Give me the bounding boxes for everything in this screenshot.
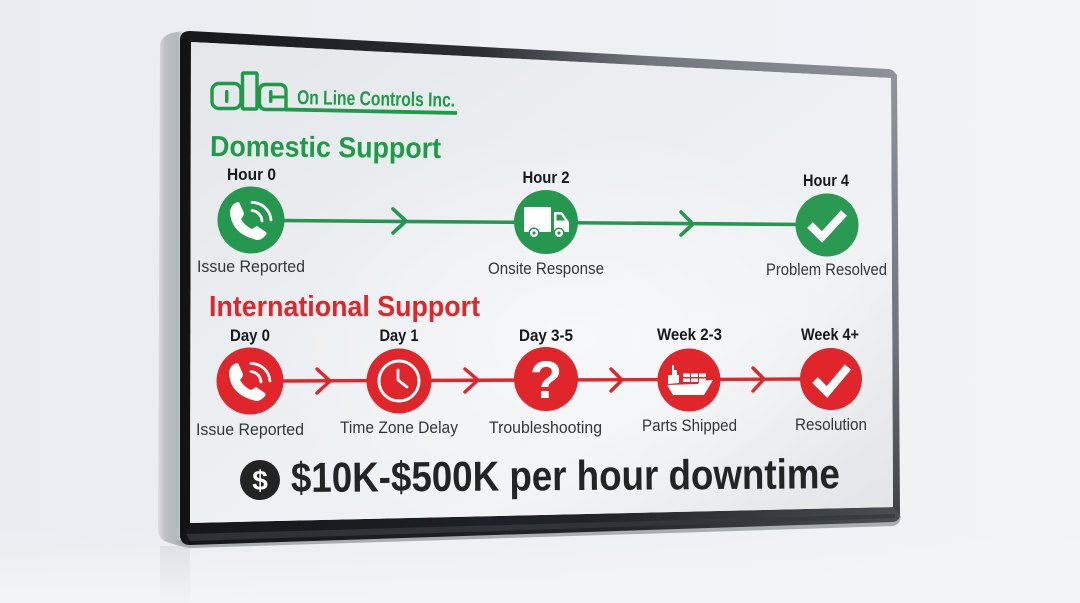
step: Hour 0 Issue Reported [197,166,305,276]
bezel bottom [180,507,900,545]
step: Week 2-3 Parts Shipped: Parts Shipped [642,417,737,435]
bezel left [180,38,191,538]
step: Hour 2 Onsite Response [488,169,604,278]
step: Day 3-5 Troubleshooting: Troubleshooting [489,419,602,437]
step: Hour 4 Problem Resolved: Hour 4 [803,172,850,190]
step: Week 4+ Resolution: Resolution [795,416,867,434]
step: Hour 4 Problem Resolved [766,172,887,279]
bezel right [891,74,900,522]
step: Hour 0 Issue Reported: Issue Reported [197,258,305,276]
step: Day 0 Issue Reported [196,327,304,439]
monitor frame [158,31,901,548]
bottom silver edge [176,516,901,548]
international timeline [196,326,867,439]
heading: International Support: International Support [209,291,480,323]
icon: dollar coin [240,460,280,500]
step: Day 0 Issue Reported: Day 0 [230,327,270,345]
heading: Domestic Support: Domestic Support [210,131,442,165]
screen [190,42,893,523]
connector line with arrows [280,209,800,235]
logo: On Line Controls Inc.: On Line Controls Inc. [297,87,455,112]
domestic timeline [197,166,887,279]
downtime cost callout [240,450,840,501]
connector line with arrows [280,368,805,393]
step: Week 2-3 Parts Shipped [642,326,737,435]
icon: dollar coin: $ [252,465,268,496]
cost text: $10K-$500K per hour downtime [291,450,840,501]
step: Week 4+ Resolution [795,326,867,434]
step: Hour 4 Problem Resolved: Problem Resolved [766,261,887,279]
step: Day 0 Issue Reported: Issue Reported [196,421,304,439]
step: Day 1 Time Zone Delay: Time Zone Delay [340,419,459,437]
step: Day 1 Time Zone Delay [340,327,459,437]
step: Week 4+ Resolution: Week 4+ [801,326,859,344]
step: Hour 2 Onsite Response: Onsite Response [488,260,604,278]
silver left side of the frame [158,31,182,547]
step: Day 3-5 Troubleshooting: ? [530,351,562,410]
bezel top [180,31,897,78]
step: Day 1 Time Zone Delay: Day 1 [380,327,418,345]
step: Day 3-5 Troubleshooting [489,327,602,437]
step: Hour 2 Onsite Response: Hour 2 [522,169,570,187]
step: Week 2-3 Parts Shipped: Week 2-3 [657,326,722,344]
step: Hour 0 Issue Reported: Hour 0 [227,166,276,184]
logo: On Line Controls Inc. [212,73,457,113]
step: Day 3-5 Troubleshooting: Day 3-5 [519,327,573,345]
